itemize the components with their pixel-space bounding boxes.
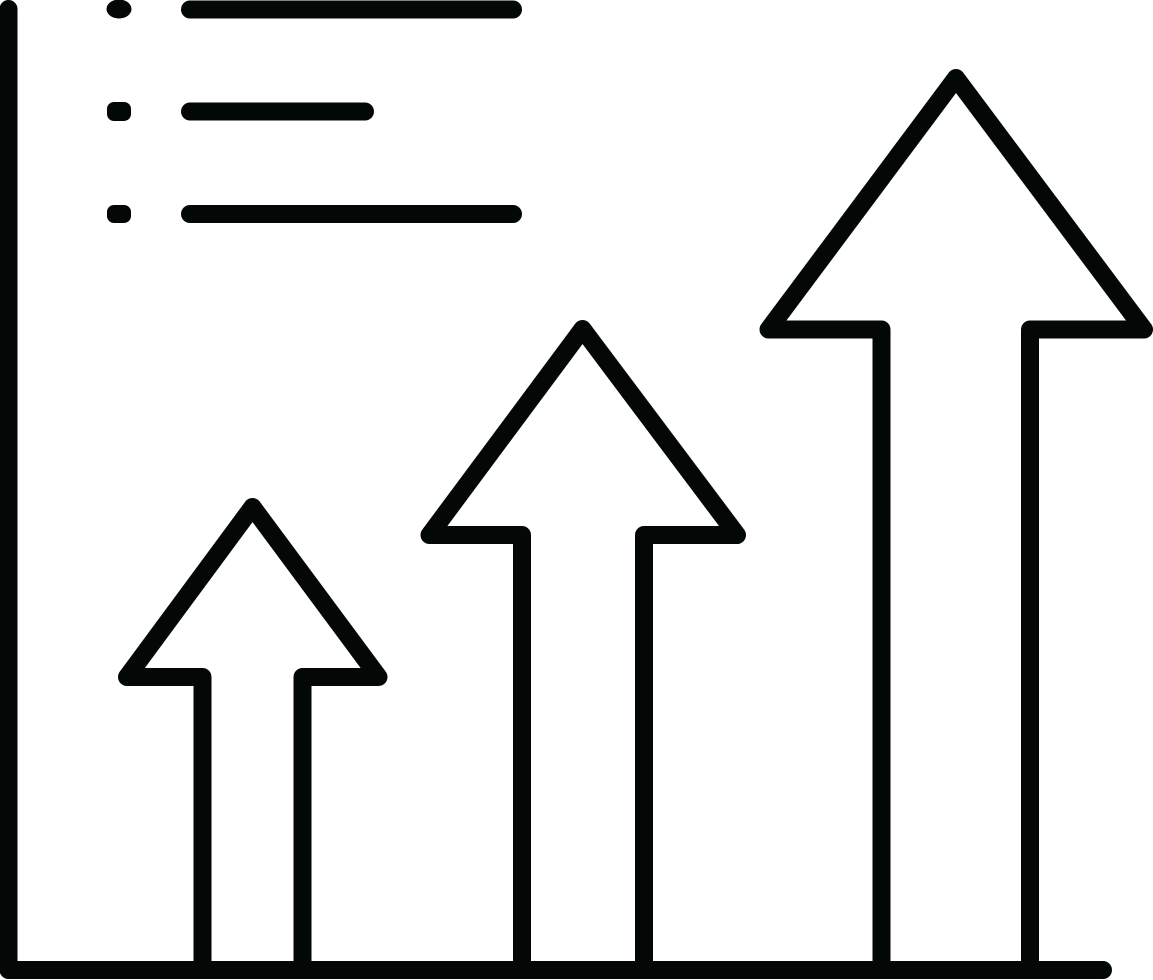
legend line 2 [190,102,365,120]
legend [106,0,513,223]
arrow: large [768,78,1144,968]
arrow: small [127,507,378,968]
legend line 1 [190,0,513,18]
arrow: medium [430,329,737,968]
legend marker 3 [107,205,131,223]
legend marker 2 [107,102,131,121]
legend marker 1 [106,0,132,18]
legend line 3 [190,205,513,223]
